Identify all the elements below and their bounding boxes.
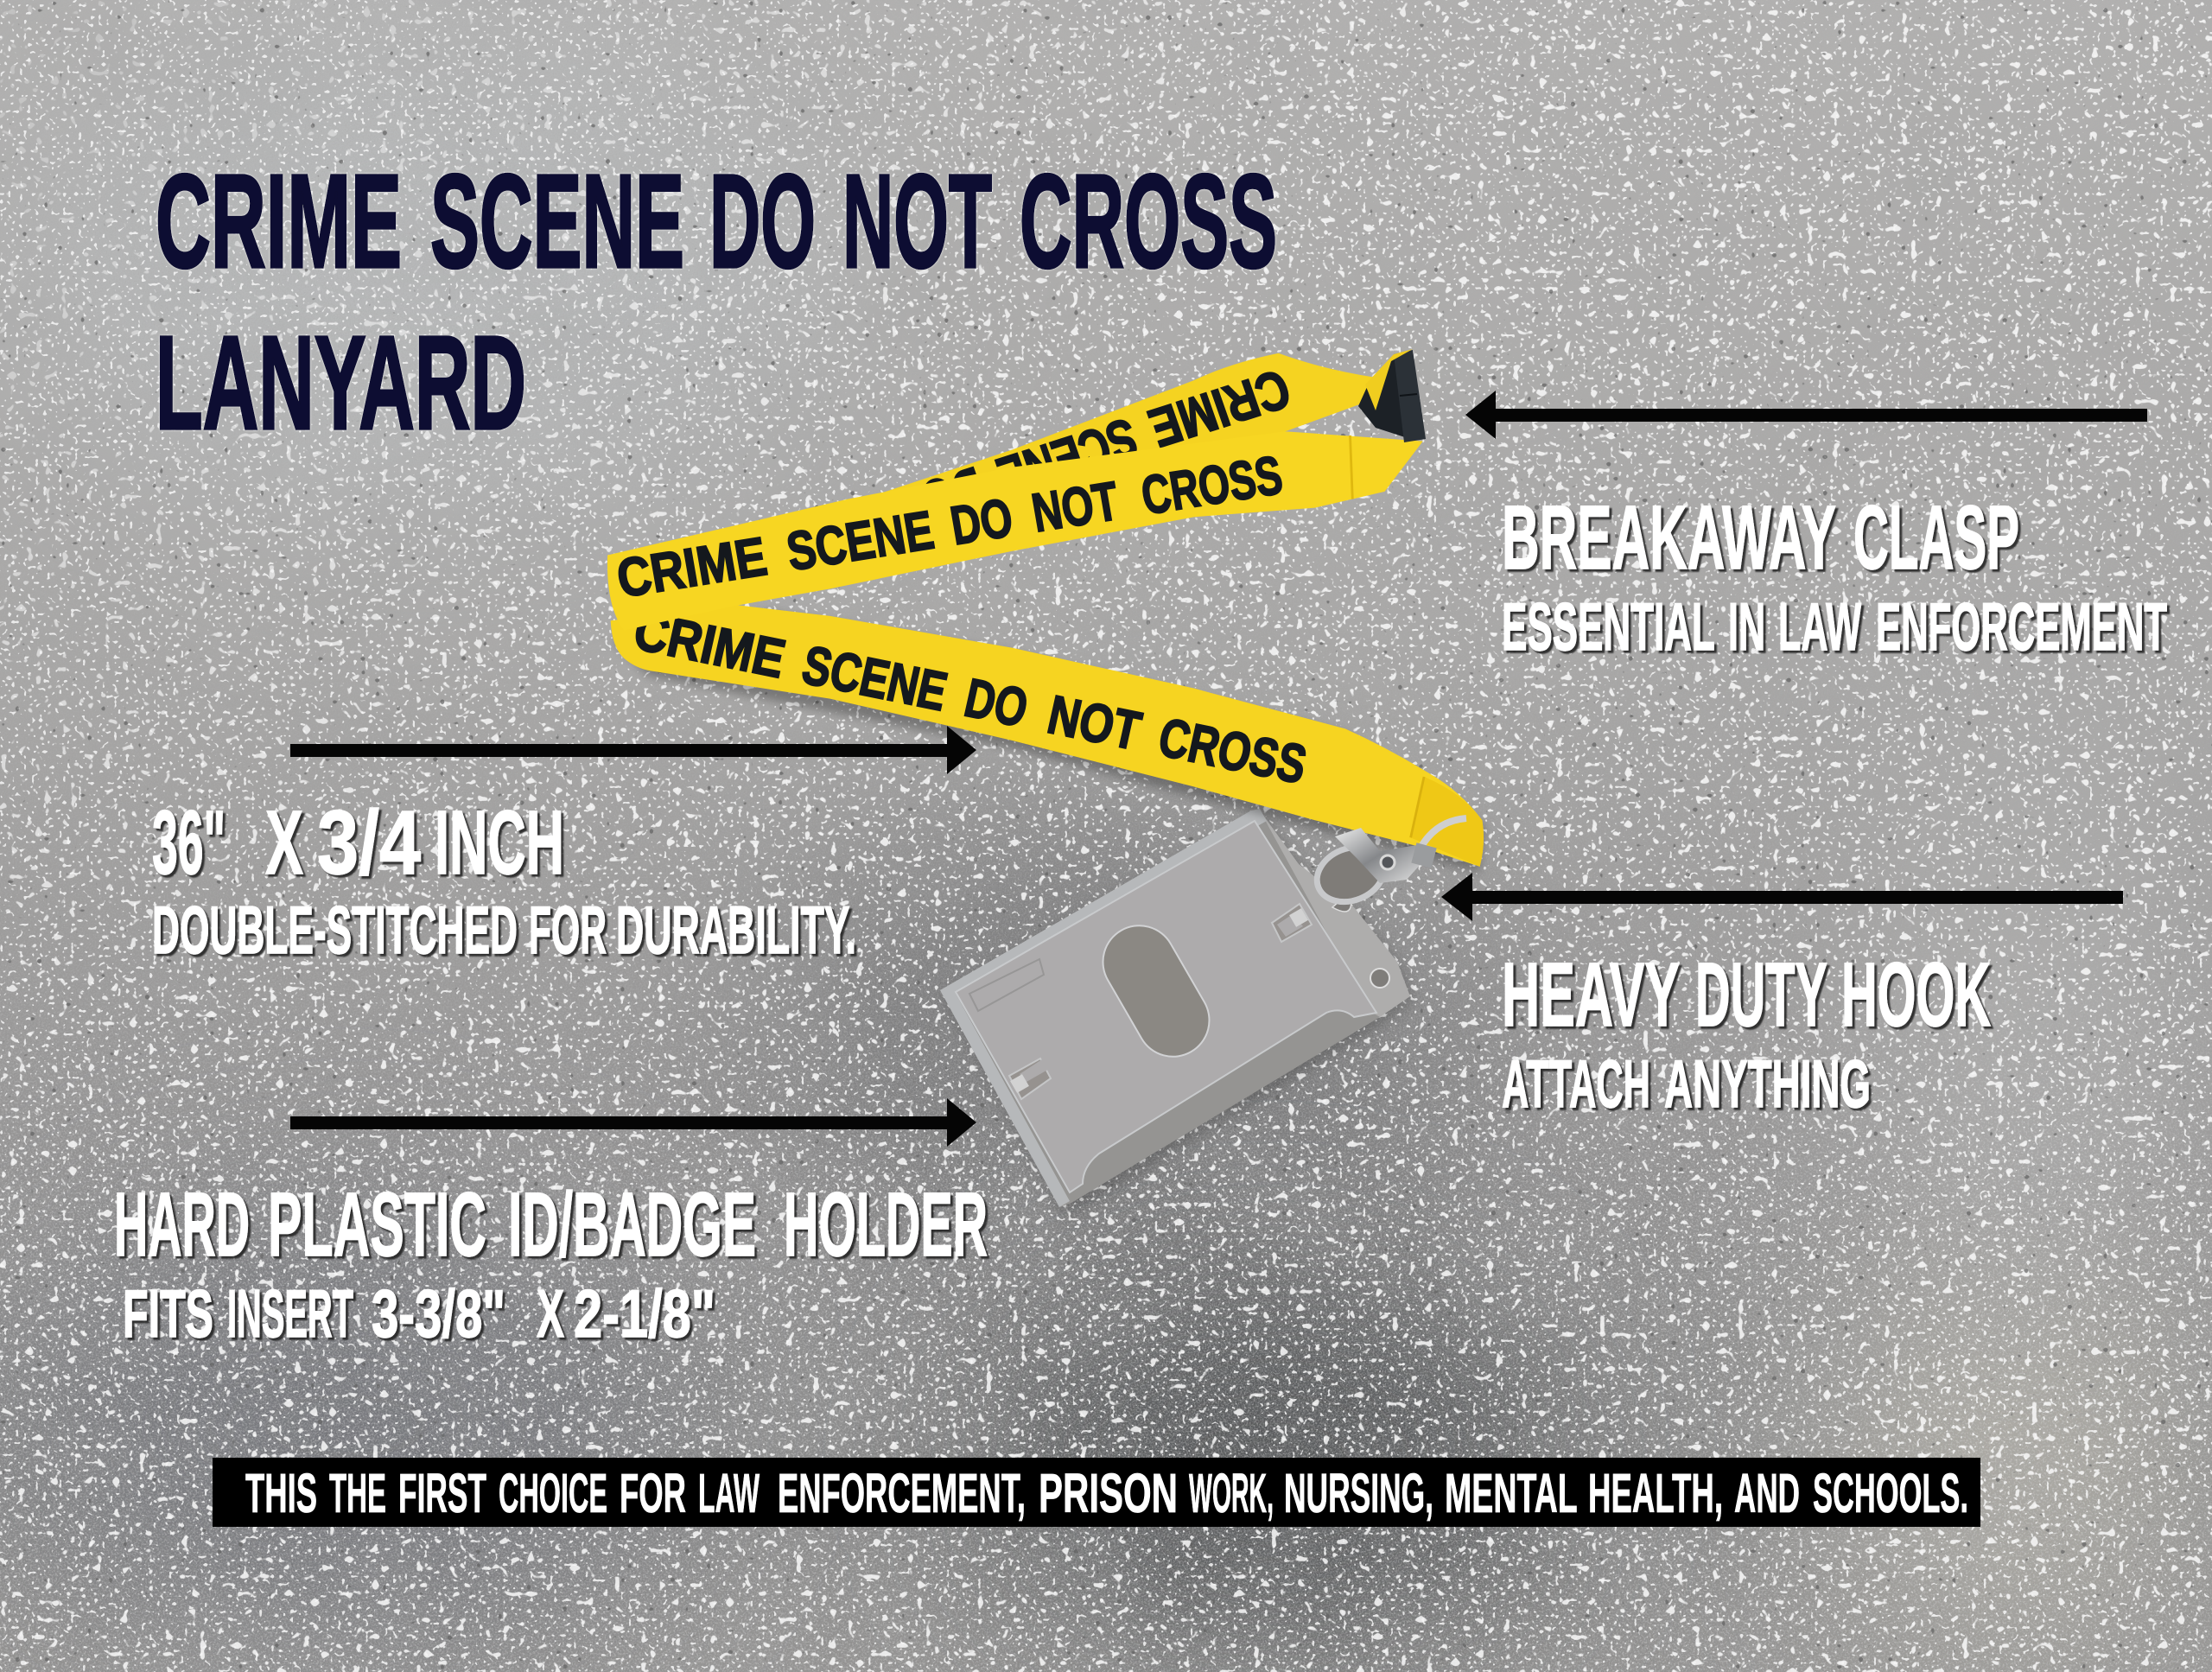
title: DO bbox=[709, 147, 816, 296]
label: heavy duty hook: ATTACH bbox=[1502, 1046, 1650, 1122]
title: NOT bbox=[842, 147, 992, 296]
title: CROSS bbox=[1020, 147, 1277, 296]
label: heavy duty hook bbox=[1502, 944, 1991, 1122]
callout banner: THIS bbox=[245, 1462, 317, 1524]
lanyard strap: SCENE bbox=[797, 634, 952, 722]
callout banner: CHOICE bbox=[499, 1462, 607, 1524]
label: badge holder bbox=[114, 1174, 988, 1351]
label: badge holder: ID/BADGE bbox=[508, 1174, 756, 1275]
label: breakaway clasp: IN bbox=[1728, 588, 1765, 664]
callout banner bbox=[213, 1458, 1980, 1527]
label: strap size: FOR bbox=[529, 892, 607, 968]
label: strap size: INCH bbox=[435, 792, 564, 893]
label: strap size: DOUBLE-STITCHED bbox=[152, 892, 518, 968]
back strap bbox=[855, 353, 1376, 502]
label: breakaway clasp bbox=[1502, 487, 2167, 664]
callout banner: MENTAL bbox=[1445, 1462, 1577, 1524]
lanyard strap: NOT bbox=[1027, 470, 1123, 544]
label: badge holder: HOLDER bbox=[784, 1174, 988, 1275]
label: breakaway clasp: BREAKAWAY bbox=[1502, 487, 1835, 588]
label: strap size: X bbox=[265, 792, 303, 893]
lanyard strap: DO bbox=[959, 667, 1033, 739]
lanyard strap: NOT bbox=[1042, 683, 1147, 762]
lanyard strap: CRIME bbox=[1141, 358, 1298, 459]
label: heavy duty hook: HOOK bbox=[1841, 944, 1991, 1046]
label: breakaway clasp: ESSENTIAL bbox=[1502, 588, 1714, 664]
lanyard strap: SCENE bbox=[782, 499, 938, 582]
label: strap size bbox=[152, 792, 856, 968]
arrow: breakaway clasp bbox=[1465, 391, 2147, 439]
label: heavy duty hook: DUTY bbox=[1695, 944, 1827, 1046]
lanyard strap: DO bbox=[914, 455, 992, 531]
title: SCENE bbox=[430, 147, 684, 296]
title: CRIME bbox=[156, 147, 402, 296]
callout banner: FOR bbox=[620, 1462, 686, 1524]
lower strap bbox=[611, 605, 1484, 867]
lanyard strap: CRIME bbox=[613, 525, 772, 609]
arrow: heavy duty hook bbox=[1441, 873, 2123, 921]
lanyard strap: CROSS bbox=[1154, 706, 1312, 795]
lanyard strap: CRIME bbox=[629, 600, 791, 690]
callout banner: FIRST bbox=[398, 1462, 486, 1524]
badge holder bbox=[940, 809, 1414, 1212]
callout banner: LAW bbox=[698, 1462, 760, 1524]
label: strap size: DURABILITY. bbox=[616, 892, 856, 968]
lanyard strap: CROSS bbox=[1137, 444, 1287, 526]
callout banner: AND bbox=[1734, 1462, 1800, 1524]
label: breakaway clasp: LAW bbox=[1778, 588, 1861, 664]
front strap bbox=[607, 431, 1423, 631]
label: heavy duty hook: ANYTHING bbox=[1664, 1046, 1871, 1122]
label: badge holder: INSERT bbox=[227, 1275, 353, 1351]
callout banner: HEALTH, bbox=[1588, 1462, 1723, 1524]
label: badge holder: PLASTIC bbox=[268, 1174, 486, 1275]
breakaway clasp bbox=[1358, 349, 1426, 442]
title: LANYARD bbox=[156, 308, 526, 457]
label: strap size: 3/4 bbox=[317, 792, 421, 893]
lanyard strap bbox=[607, 353, 1484, 873]
callout banner: ENFORCEMENT, bbox=[778, 1462, 1026, 1524]
label: badge holder: X bbox=[537, 1275, 564, 1351]
product photo: lanyard and badge holder bbox=[607, 349, 1484, 1212]
arrow: strap length bbox=[290, 726, 976, 774]
label: badge holder: 2-1/8" bbox=[574, 1275, 715, 1351]
callout banner: PRISON bbox=[1039, 1462, 1178, 1524]
label: breakaway clasp: CLASP bbox=[1853, 487, 2019, 588]
callout banner: THE bbox=[329, 1462, 386, 1524]
heavy duty hook bbox=[1309, 818, 1466, 912]
callout banner: WORK, bbox=[1189, 1462, 1274, 1524]
strap shadow bbox=[612, 612, 1484, 873]
label: strap size: 36" bbox=[152, 792, 226, 893]
callout banner: SCHOOLS. bbox=[1813, 1462, 1968, 1524]
label: badge holder: 3-3/8" bbox=[372, 1275, 505, 1351]
lanyard strap: DO bbox=[946, 486, 1017, 556]
arrow: badge holder bbox=[290, 1098, 976, 1147]
label: badge holder: FITS bbox=[123, 1275, 213, 1351]
title bbox=[156, 147, 1277, 457]
label: heavy duty hook: HEAVY bbox=[1502, 944, 1679, 1046]
label: badge holder: HARD bbox=[114, 1174, 250, 1275]
lanyard strap: SCENE bbox=[989, 406, 1145, 507]
callout banner: NURSING, bbox=[1284, 1462, 1433, 1524]
